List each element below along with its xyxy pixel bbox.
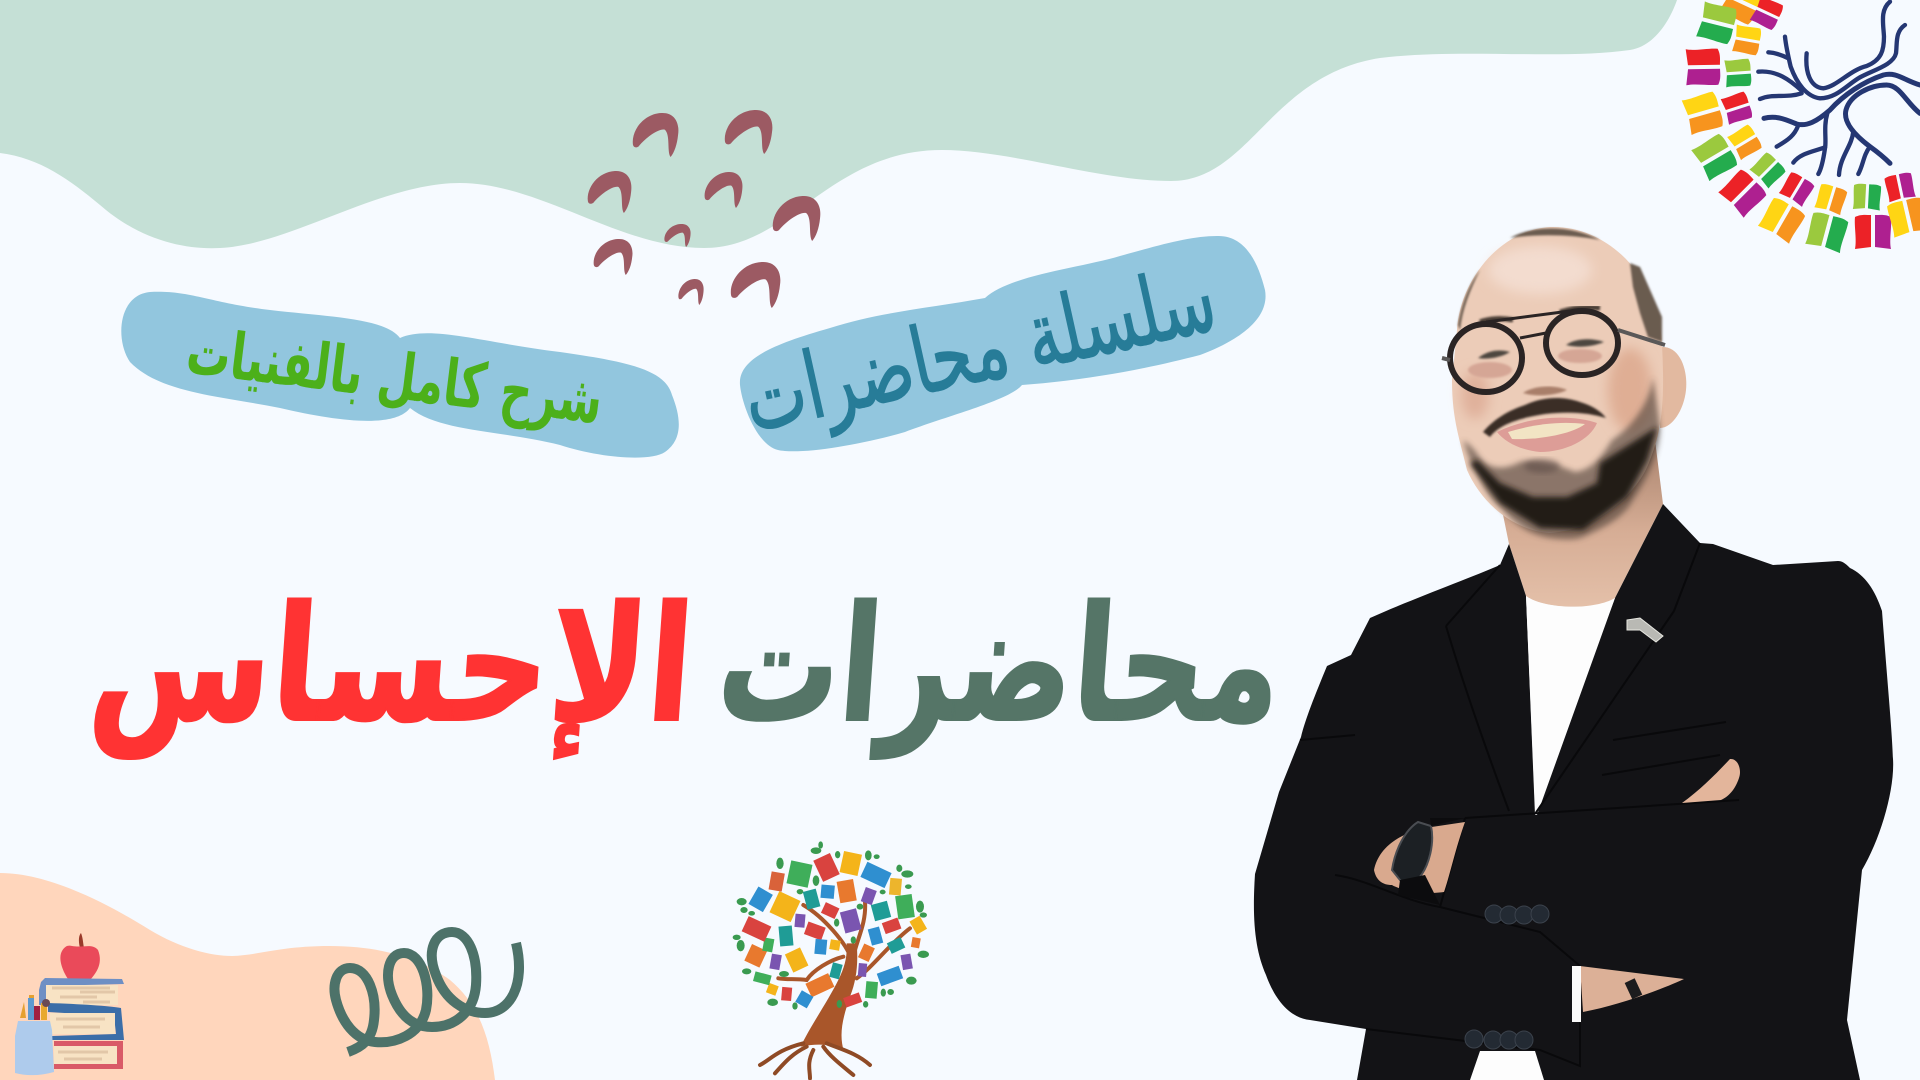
jacket seams [1300,543,1739,1066]
logo: navy root branches [1758,2,1920,175]
logo: ring of books [1682,0,1920,253]
beard stubble [1463,377,1660,539]
wrist band [1625,978,1642,999]
ear [1660,347,1686,428]
white shirt cuff [1572,966,1581,1022]
icon: books, apple and pencil jar [15,933,124,1075]
title: الإحساس [84,571,699,759]
title: محاضرات [712,571,1287,760]
eyes [1468,339,1604,378]
white shirt [1526,596,1615,815]
sleeve buttons [1465,905,1549,1049]
decorative hook marks [588,110,820,308]
callout: lecture series: سلسلة محاضرات [733,245,1225,454]
watch strap [1398,818,1465,905]
smart watch [1392,822,1432,883]
eyebrows [1480,307,1600,322]
icon: spiral squiggle [335,932,519,1052]
tree trunk and roots [760,902,910,1078]
glasses [1442,311,1665,392]
callout: full technical explanation: شرح كامل بالفنيات [183,315,607,439]
hair [1458,228,1662,342]
head [1452,227,1663,533]
chin patch [1524,459,1560,473]
peach wave blob [0,873,495,1080]
lower wrist [1580,966,1684,1012]
person: presenter [1254,227,1893,1080]
title [84,571,1287,760]
wrist with watch [1374,822,1465,893]
mustache [1483,398,1606,437]
callout: full technical explanation [121,292,679,458]
neck [1500,440,1663,607]
small books [742,851,927,1008]
callout: lecture series [733,236,1266,454]
jacket [1254,504,1893,1080]
nose shadow [1523,387,1567,395]
mouth [1497,418,1597,452]
leaves [733,841,929,1010]
beard core [1470,427,1657,530]
icon: tree of books [733,841,929,1078]
upper hand [1682,759,1740,803]
green wave blob [0,0,1677,248]
lapel pin [1627,618,1663,642]
cheek and temple shading [1461,246,1652,432]
shirt lower part [1470,1051,1544,1080]
